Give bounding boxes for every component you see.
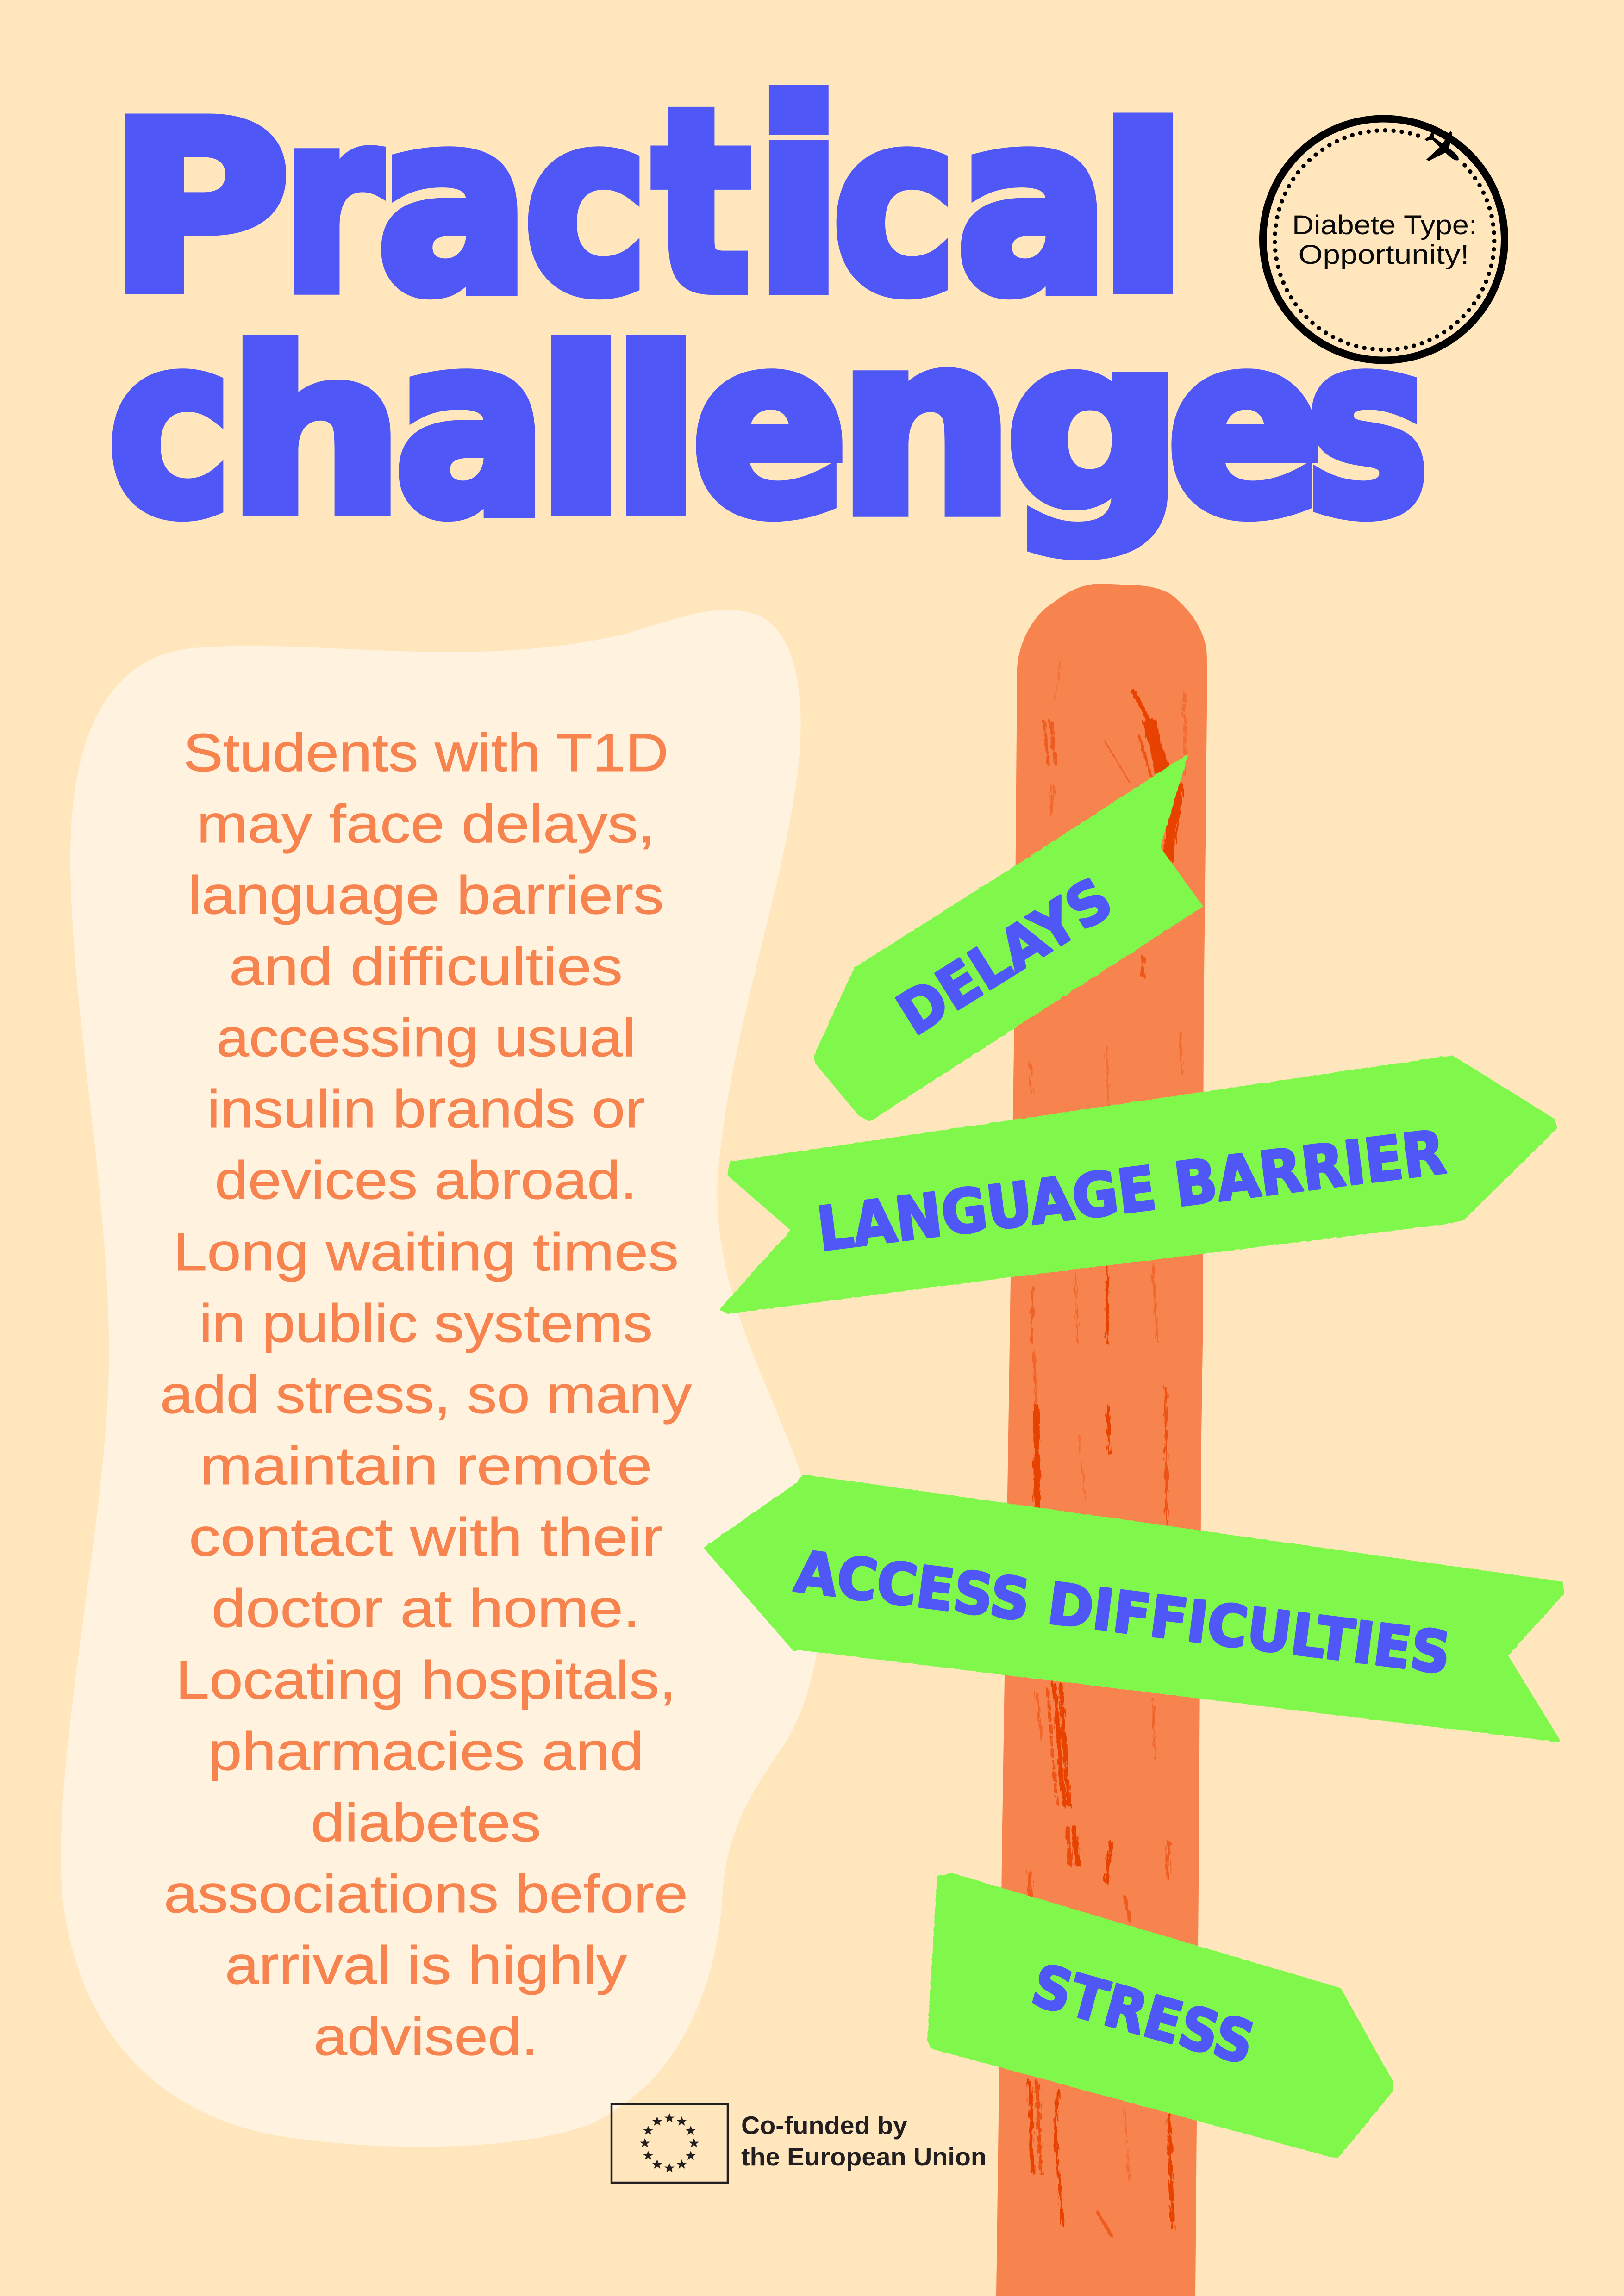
title line: challenges: n (838, 283, 1013, 568)
body text: in public systems (199, 1293, 653, 1353)
title line: challenges: c (108, 285, 232, 570)
body text (160, 722, 692, 2066)
icon: airplane (1415, 122, 1469, 175)
badge: Diabete Type Opportunity (1263, 118, 1505, 360)
panel: cream text blob (61, 610, 821, 2147)
title line: challenges: l (536, 304, 626, 564)
sign label: ACCESS DIFFICULTIES: ACCESS DIFFICULTIES (791, 1539, 1454, 1687)
body text: Long waiting times (173, 1222, 679, 1282)
sign: LANGUAGE BARRIER (721, 1057, 1556, 1313)
title line: Practical: t (653, 57, 750, 347)
body text: accessing usual (216, 1008, 636, 1068)
title (108, 48, 1429, 570)
body text: doctor at home. (212, 1578, 640, 1638)
title line: Practical: c (833, 62, 956, 348)
title line: challenges: e (692, 285, 848, 570)
title line: challenges: a (395, 285, 547, 570)
body text: language barriers (188, 865, 664, 925)
title line: Practical (108, 48, 1188, 350)
EU flag box (612, 2104, 728, 2183)
badge text: Opportunity! (1298, 240, 1469, 270)
title line: challenges: g (1006, 290, 1182, 559)
signpost: wooden post (996, 584, 1207, 2296)
title line: Practical: a (377, 63, 529, 348)
title line: Practical: i (754, 48, 844, 350)
body text: advised. (314, 2006, 538, 2066)
title line: challenges: e (1168, 285, 1323, 570)
title line: challenges (108, 283, 1429, 570)
title line: Practical: r (282, 61, 383, 346)
EU text: Co-funded by (741, 2111, 907, 2140)
body text: arrival is highly (225, 1935, 627, 1995)
title line: challenges: h (228, 303, 403, 563)
badge text: Diabete Type: (1292, 210, 1477, 240)
sign label: LANGUAGE BARRIER: LANGUAGE BARRIER (813, 1117, 1449, 1265)
title line: Practical: c (525, 62, 648, 348)
body text: Students with T1D (183, 722, 668, 783)
body text: devices abroad. (215, 1150, 637, 1210)
dotted flight path (1275, 131, 1494, 350)
body text: associations before (164, 1864, 688, 1924)
sign label: STRESS: STRESS (1025, 1952, 1262, 2078)
logo: EU co-funded (612, 2104, 987, 2183)
sign: STRESS (929, 1874, 1392, 2156)
title line: Practical: a (957, 63, 1109, 348)
body text: maintain remote (200, 1436, 652, 1496)
post wood grain (1029, 662, 1185, 2235)
title line: Practical: l (1098, 81, 1188, 342)
sign label: DELAYS: DELAYS (886, 865, 1124, 1048)
body text: diabetes (311, 1792, 541, 1853)
body text: pharmacies and (208, 1721, 644, 1781)
title line: challenges: l (611, 304, 701, 564)
badge text (1292, 210, 1477, 270)
body text: insulin brands or (207, 1079, 645, 1139)
sign: DELAYS (814, 756, 1202, 1120)
title line: Practical: P (108, 74, 290, 343)
EU text (741, 2111, 987, 2171)
body text: and difficulties (229, 936, 623, 996)
body text: may face delays, (197, 794, 655, 854)
EU text: the European Union (741, 2142, 987, 2171)
sign: ACCESS DIFFICULTIES (706, 1476, 1563, 1741)
body text: add stress, so many (160, 1364, 692, 1425)
title line: challenges: s (1306, 286, 1429, 570)
body text: Locating hospitals, (176, 1650, 676, 1710)
body text: contact with their (189, 1507, 663, 1567)
